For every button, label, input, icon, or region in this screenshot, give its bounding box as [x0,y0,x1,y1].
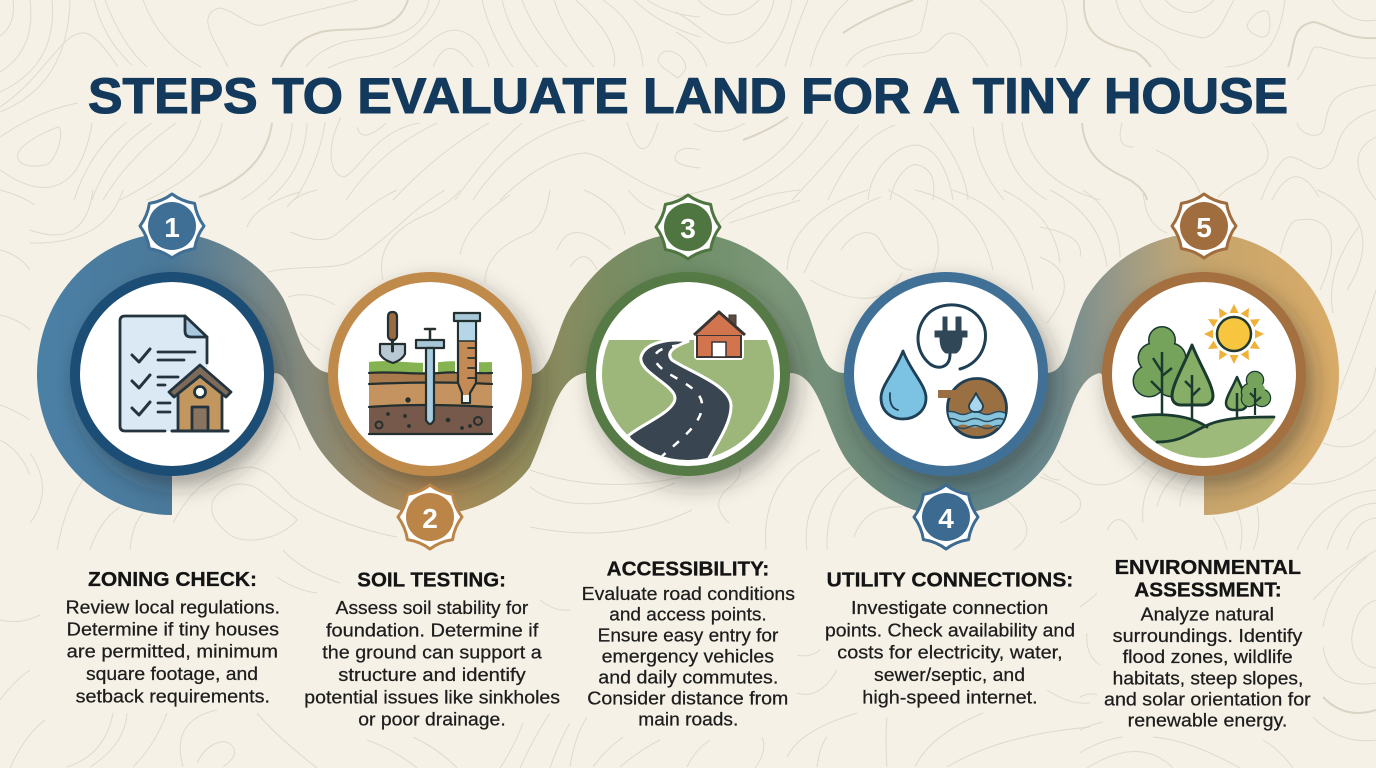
step 3 medallion [586,195,790,476]
ring 2 [328,272,532,476]
text block: zoning check: square footage, and [86,664,258,684]
step 4 medallion [844,272,1048,549]
text block: utility connections: Investigate connection [851,598,1048,618]
text block: zoning check: ZONING CHECK: [88,569,257,591]
ring 5 [1102,272,1306,476]
icon: trees, hills and sun [1132,304,1276,458]
text block: soil testing: Assess soil stability for [336,598,528,618]
text block: accessibility: Ensure easy entry for [598,626,778,646]
winding ribbon path [37,233,1339,515]
title: STEPS TO EVALUATE LAND FOR A TINY HOUSE [88,68,1288,124]
text block: soil testing: or poor drainage. [358,710,506,730]
ring 1 [70,272,274,476]
text block: accessibility: Consider distance from [587,689,788,709]
text block: environmental assessment: and solar orientation for [1104,690,1311,710]
text block: soil testing: structure and identify [338,665,526,685]
badge 4 [914,485,978,549]
text block: utility connections: UTILITY CONNECTIONS: [827,570,1073,592]
badge 2 [398,485,462,549]
badge 3 [656,195,720,259]
text block: accessibility: and access points. [609,605,767,625]
text block: environmental assessment: renewable energy. [1128,711,1287,731]
badge 2: 2 [422,503,438,534]
badge 5: 5 [1196,212,1212,243]
text block: environmental assessment: ASSESSMENT: [1134,580,1282,602]
text block: environmental assessment: ENVIRONMENTAL [1115,557,1301,579]
icon: soil layers and tools [369,312,492,434]
badge 1 [140,194,204,258]
text block: soil testing: the ground can support a [322,643,543,663]
text block: zoning check: setback requirements. [76,686,270,706]
text block: accessibility: Evaluate road conditions [582,584,795,604]
text block: soil testing [304,570,560,730]
text block: zoning check: Review local regulations. [66,597,280,617]
text block: environmental assessment [1104,557,1311,731]
text block: accessibility: and daily commutes. [598,668,778,688]
text block: soil testing: SOIL TESTING: [357,570,506,592]
ring 3 [586,272,790,476]
step 2 medallion [328,272,532,549]
text block: utility connections [825,570,1075,708]
text block: environmental assessment: habitats, steep slopes, [1113,668,1303,688]
text block: utility connections: sewer/septic, and [874,665,1025,685]
text block: soil testing: potential issues like sinkholes [304,688,560,708]
text block: environmental assessment: flood zones, wildlife [1123,647,1293,667]
text block: utility connections: points. Check availability and [825,621,1075,641]
step 5 medallion [1102,194,1306,476]
badge 3: 3 [680,213,696,244]
text block: utility connections: high-speed internet. [862,688,1038,708]
text block: accessibility: ACCESSIBILITY: [607,558,769,580]
text block: zoning check [66,569,280,706]
icon: plug, water drop and septic [881,305,1006,438]
text block: accessibility: main roads. [638,710,738,730]
text block: accessibility: emergency vehicles [602,647,774,667]
badge 1: 1 [164,212,180,243]
text block: soil testing: foundation. Determine if [326,621,539,641]
badge 5 [1172,194,1236,258]
icon: winding road to house [602,310,774,460]
icon: checklist and house [120,316,231,431]
text block: environmental assessment: Analyze natural [1141,605,1274,625]
badge 4: 4 [938,503,954,534]
text block: utility connections: costs for electricity, water, [837,643,1063,663]
step 1 medallion [70,194,274,476]
ring 4 [844,272,1048,476]
text block: environmental assessment: surroundings. Identify [1113,626,1302,646]
text block: accessibility [582,558,795,730]
text block: zoning check: Determine if tiny houses [67,620,279,640]
text block: zoning check: are permitted, minimum [67,642,278,662]
